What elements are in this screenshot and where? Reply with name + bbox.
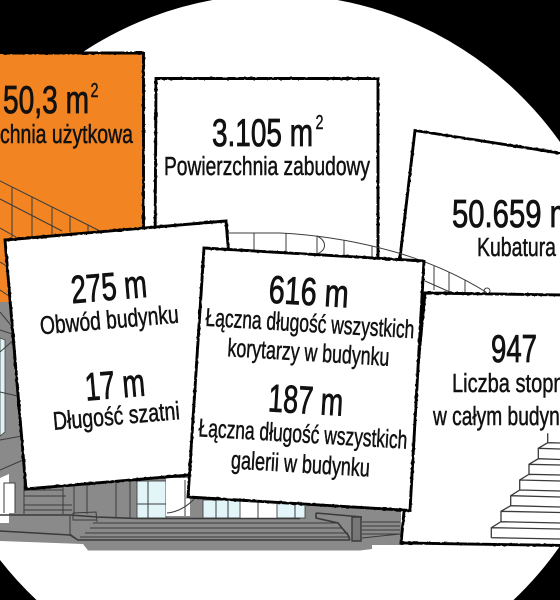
panel: built-up area <box>155 78 378 262</box>
right lines <box>362 522 400 538</box>
building roof arch <box>228 233 490 294</box>
icon: staircase <box>491 433 560 539</box>
left white window <box>0 474 15 523</box>
label: galleries line two: galerii w budynku <box>230 446 371 483</box>
label: cloakroom: Długość szatni <box>52 397 181 436</box>
entry block <box>70 512 97 540</box>
superscript: usable area unit: 2 <box>90 80 98 102</box>
heading: steps value: 947 <box>491 328 537 371</box>
main stairs <box>80 523 350 537</box>
panel: perimeter and cloakroom <box>5 221 247 489</box>
heading: perimeter value: 275 m <box>69 263 149 312</box>
label: usable area: chnia użytkowa <box>0 121 134 149</box>
facade left lines <box>0 312 26 490</box>
lower windows <box>203 500 305 518</box>
facade glass on the left <box>0 338 5 436</box>
heading: built-up area value: 3.105 m <box>212 112 313 155</box>
building glass grid on orange <box>0 181 100 296</box>
label: perimeter: Obwód budynku <box>39 301 180 340</box>
heading: galleries value: 187 m <box>267 377 344 425</box>
white entrance <box>166 478 190 516</box>
right column <box>352 517 361 541</box>
left stair lines <box>24 480 130 518</box>
superscript: built-up area unit: 2 <box>316 112 324 134</box>
blue windows <box>137 481 166 518</box>
label: built-up area: Powierzchnia zabudowy <box>164 153 370 181</box>
panel: usable area (orange) <box>0 53 144 302</box>
building facade (grey) <box>0 302 401 550</box>
label: corridors line one: Łączna długość wszystkich <box>205 304 415 344</box>
panel: corridors and galleries <box>188 248 424 510</box>
label: corridors line two: korytarzy w budynku <box>227 334 390 372</box>
lower mullions <box>216 500 295 518</box>
lower blue glass left <box>203 500 240 518</box>
heading: usable area value: 50,3 m <box>3 79 89 122</box>
label: galleries line one: Łączna długość wszystkich <box>198 414 408 455</box>
entrance curve <box>167 480 195 516</box>
panel: number of steps <box>401 293 560 546</box>
heading: corridors value: 616 m <box>268 269 350 316</box>
right dark beam <box>316 513 362 540</box>
lower blue glass right <box>277 500 305 518</box>
heading: cloakroom value: 17 m <box>83 362 147 410</box>
panel: volume <box>395 130 560 300</box>
ground lines <box>0 515 350 540</box>
blue window mullions <box>137 481 166 518</box>
